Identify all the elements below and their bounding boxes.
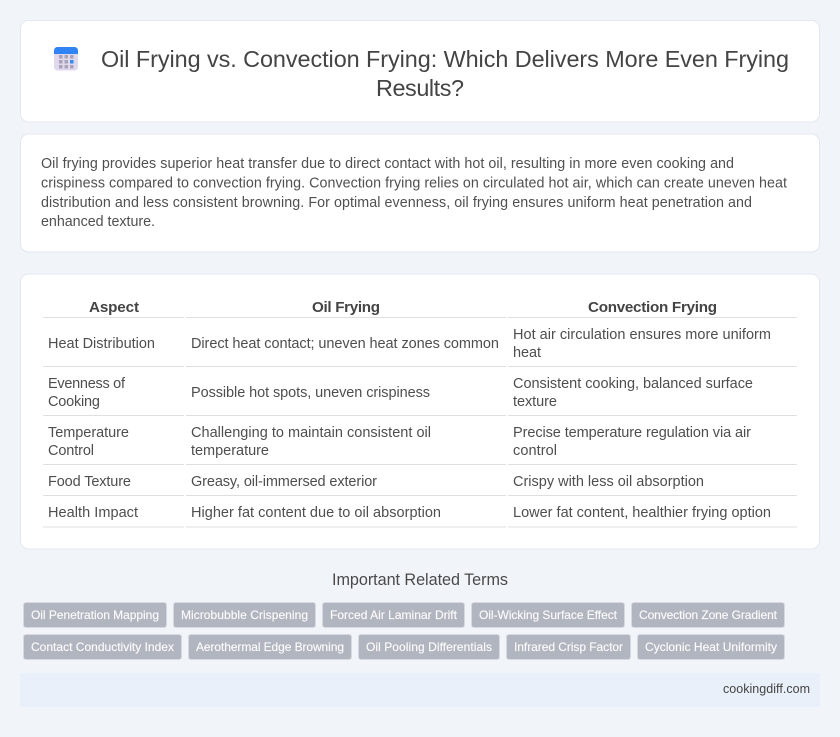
tag list: related terms: Infrared Crisp Factor — [514, 640, 623, 654]
tag list: related terms — [24, 602, 784, 660]
footer bar — [20, 673, 820, 707]
tag list: related terms: Contact Conductivity Index — [31, 640, 174, 654]
heading: related terms: Important Related Terms — [332, 571, 508, 589]
title: Oil Frying vs. Convection Frying: Which Delivers More Even Frying — [101, 46, 789, 72]
table row: heat distribution: Heat Distribution — [48, 336, 155, 352]
table header row: Aspect — [89, 299, 139, 316]
tag list: related terms: Aerothermal Edge Browning — [196, 640, 344, 654]
table header row — [43, 299, 797, 318]
table row: health impact: Higher fat content due to oil absorption — [191, 505, 441, 521]
tag list: related terms: Convection Zone Gradient — [639, 608, 778, 622]
table row: evenness of cooking — [43, 376, 797, 416]
text block: introduction paragraph: enhanced texture. — [41, 214, 155, 230]
table header row: Convection Frying — [588, 299, 717, 316]
tag list: related terms: Microbubble Crispening — [181, 608, 308, 622]
table row: temperature control: control — [513, 443, 557, 459]
table row: temperature control: Precise temperature regulation via air — [513, 425, 751, 441]
table row: heat distribution: heat — [513, 345, 541, 361]
table row: temperature control: temperature — [191, 443, 269, 459]
table row: evenness of cooking: Cooking — [48, 394, 100, 410]
icon: calendar — [54, 47, 78, 70]
title — [101, 46, 789, 101]
tag list: related terms: Oil Penetration Mapping — [31, 608, 159, 622]
panel: header — [20, 20, 820, 122]
table row: health impact: Health Impact — [48, 505, 138, 521]
table row: evenness of cooking: Evenness of — [48, 376, 126, 392]
table row: food texture: Greasy, oil-immersed exterior — [191, 474, 377, 490]
tag list: related terms: Cyclonic Heat Uniformity — [645, 640, 777, 654]
table row: health impact — [43, 505, 797, 528]
table row: evenness of cooking: Possible hot spots, uneven crispiness — [191, 385, 430, 401]
table row: temperature control: Temperature — [48, 425, 129, 441]
table row: heat distribution — [43, 327, 797, 367]
table row: food texture: Food Texture — [48, 474, 131, 490]
panel: comparison table — [20, 274, 820, 549]
table row: evenness of cooking: texture — [513, 394, 557, 410]
table row: heat distribution: Hot air circulation ensures more uniform — [513, 327, 771, 343]
text block: introduction paragraph: crispiness compared to convection frying. Convection frying relies on circulated hot air, which can create uneven heat — [41, 176, 787, 192]
text block: introduction paragraph: Oil frying provides superior heat transfer due to direct contact with hot oil, resulting in more even cooking and — [41, 156, 734, 172]
title: Results? — [376, 75, 464, 101]
table row: heat distribution: Direct heat contact; uneven heat zones common — [191, 336, 499, 352]
footer source text: cookingdiff.com — [723, 682, 810, 696]
panel: introduction — [20, 134, 820, 252]
table header row: Oil Frying — [312, 299, 380, 316]
text block: introduction paragraph — [41, 156, 787, 230]
table row: food texture — [43, 474, 797, 496]
tag list: related terms: Oil-Wicking Surface Effect — [479, 608, 618, 622]
table row: temperature control: Challenging to maintain consistent oil — [191, 425, 431, 441]
table row: evenness of cooking: Consistent cooking, balanced surface — [513, 376, 753, 392]
table row: temperature control — [43, 425, 797, 465]
table row: temperature control: Control — [48, 443, 94, 459]
tag list: related terms: Oil Pooling Differentials — [366, 640, 492, 654]
tag list: related terms: Forced Air Laminar Drift — [330, 608, 458, 622]
table row: health impact: Lower fat content, healthier frying option — [513, 505, 771, 521]
text block: introduction paragraph: distribution and less consistent browning. For optimal evenness, oil frying ensures uniform heat penetration and — [41, 195, 752, 211]
table row: food texture: Crispy with less oil absorption — [513, 474, 704, 490]
